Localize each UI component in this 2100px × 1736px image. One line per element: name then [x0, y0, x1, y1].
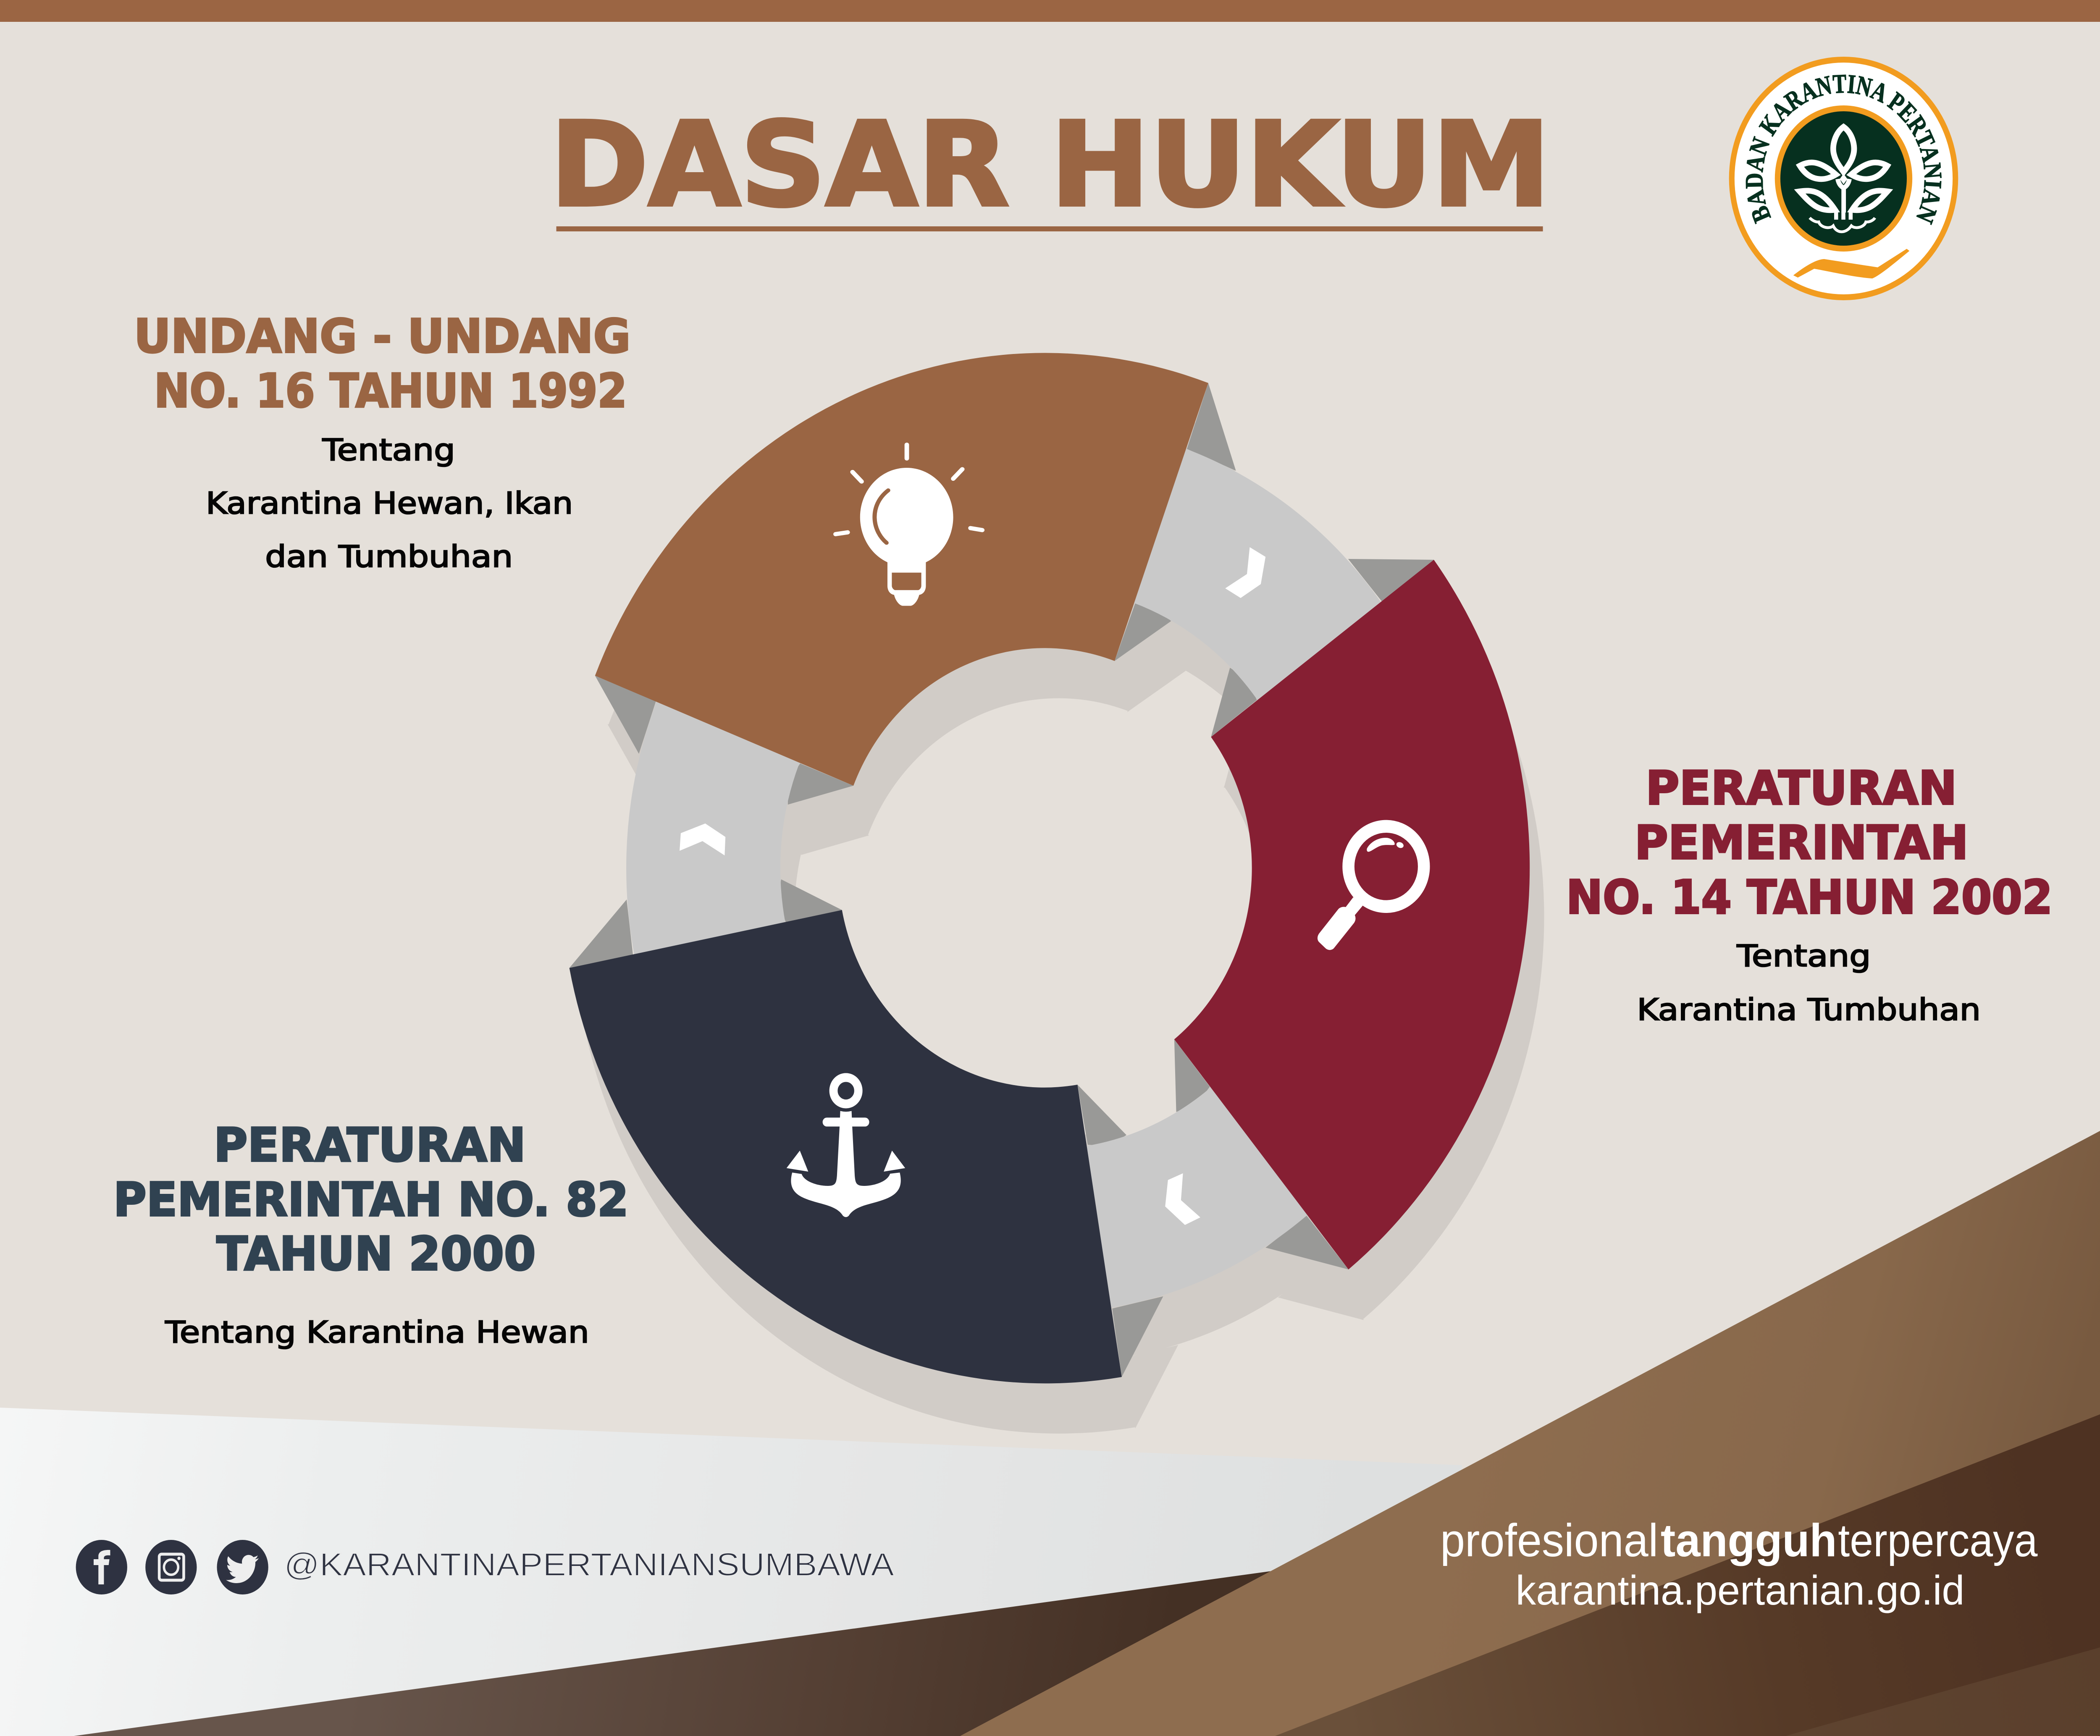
logo: Badan Karantina Pertanian: BADAN KARANTINA PERTANIAN — [1740, 69, 1947, 227]
text block: Peraturan Pemerintah No. 82 Tahun 2000: PERATURAN — [214, 1118, 526, 1172]
footer background shapes — [0, 1131, 2100, 1736]
segment: navy — [570, 910, 1122, 1383]
tagline: terpercaya — [1838, 1514, 2038, 1566]
website: karantina.pertanian.go.id — [1516, 1568, 1964, 1614]
text block: Undang-Undang No. 16 Tahun 1992: dan Tumbuhan — [265, 540, 513, 574]
segment: red — [1174, 560, 1530, 1269]
tagline — [1440, 1514, 2038, 1566]
tagline: profesional — [1440, 1514, 1658, 1566]
text block: Peraturan Pemerintah No. 14 Tahun 2002: PERATURAN — [1646, 761, 1957, 816]
arrow: chevron bottom right — [1165, 1173, 1200, 1225]
segment: brown — [595, 353, 1208, 786]
text block: Undang-Undang No. 16 Tahun 1992: NO. 16 TAHUN 1992 — [154, 364, 627, 418]
text block: Peraturan Pemerintah No. 82 Tahun 2000 — [113, 1118, 629, 1350]
text block: Peraturan Pemerintah No. 14 Tahun 2002: PEMERINTAH — [1635, 816, 1969, 870]
title: DASAR HUKUM — [550, 98, 1550, 233]
icon: facebook — [76, 1540, 127, 1594]
tagline: tangguh — [1661, 1514, 1837, 1566]
fold shadows at segment ends — [570, 383, 1434, 1377]
text block: Undang-Undang No. 16 Tahun 1992: UNDANG - UNDANG — [134, 309, 630, 364]
icon: light bulb — [835, 445, 982, 606]
ring drop shadow — [583, 402, 1544, 1433]
text block: Peraturan Pemerintah No. 14 Tahun 2002: NO. 14 TAHUN 2002 — [1566, 871, 2053, 925]
grey connector ring — [704, 505, 1387, 1231]
icon: magnifying glass — [1318, 826, 1424, 950]
text block: Undang-Undang No. 16 Tahun 1992: Karantina Hewan, Ikan — [206, 486, 573, 521]
arrow: chevron top right — [1225, 547, 1265, 598]
top bar — [0, 0, 2100, 22]
text block: Peraturan Pemerintah No. 82 Tahun 2000: Tentang Karantina Hewan — [165, 1315, 589, 1350]
text block: Peraturan Pemerintah No. 14 Tahun 2002: Tentang — [1736, 939, 1871, 974]
text block: Peraturan Pemerintah No. 82 Tahun 2000: TAHUN 2000 — [217, 1227, 536, 1281]
text block: Peraturan Pemerintah No. 82 Tahun 2000: PEMERINTAH NO. 82 — [113, 1173, 629, 1227]
logo: Badan Karantina Pertanian — [1729, 57, 1958, 300]
text block: Peraturan Pemerintah No. 14 Tahun 2002 — [1566, 761, 2053, 1028]
icon: instagram — [145, 1540, 197, 1594]
text block: Undang-Undang No. 16 Tahun 1992: Tentang — [322, 433, 455, 468]
text block: Peraturan Pemerintah No. 14 Tahun 2002: Karantina Tumbuhan — [1637, 993, 1981, 1028]
icon: twitter — [217, 1540, 268, 1594]
icon: anchor — [787, 1078, 905, 1217]
arrow: chevron left — [680, 823, 725, 855]
text block: Undang-Undang No. 16 Tahun 1992 — [134, 309, 630, 574]
social handle: @KARANTINAPERTANIANSUMBAWA — [284, 1546, 894, 1582]
